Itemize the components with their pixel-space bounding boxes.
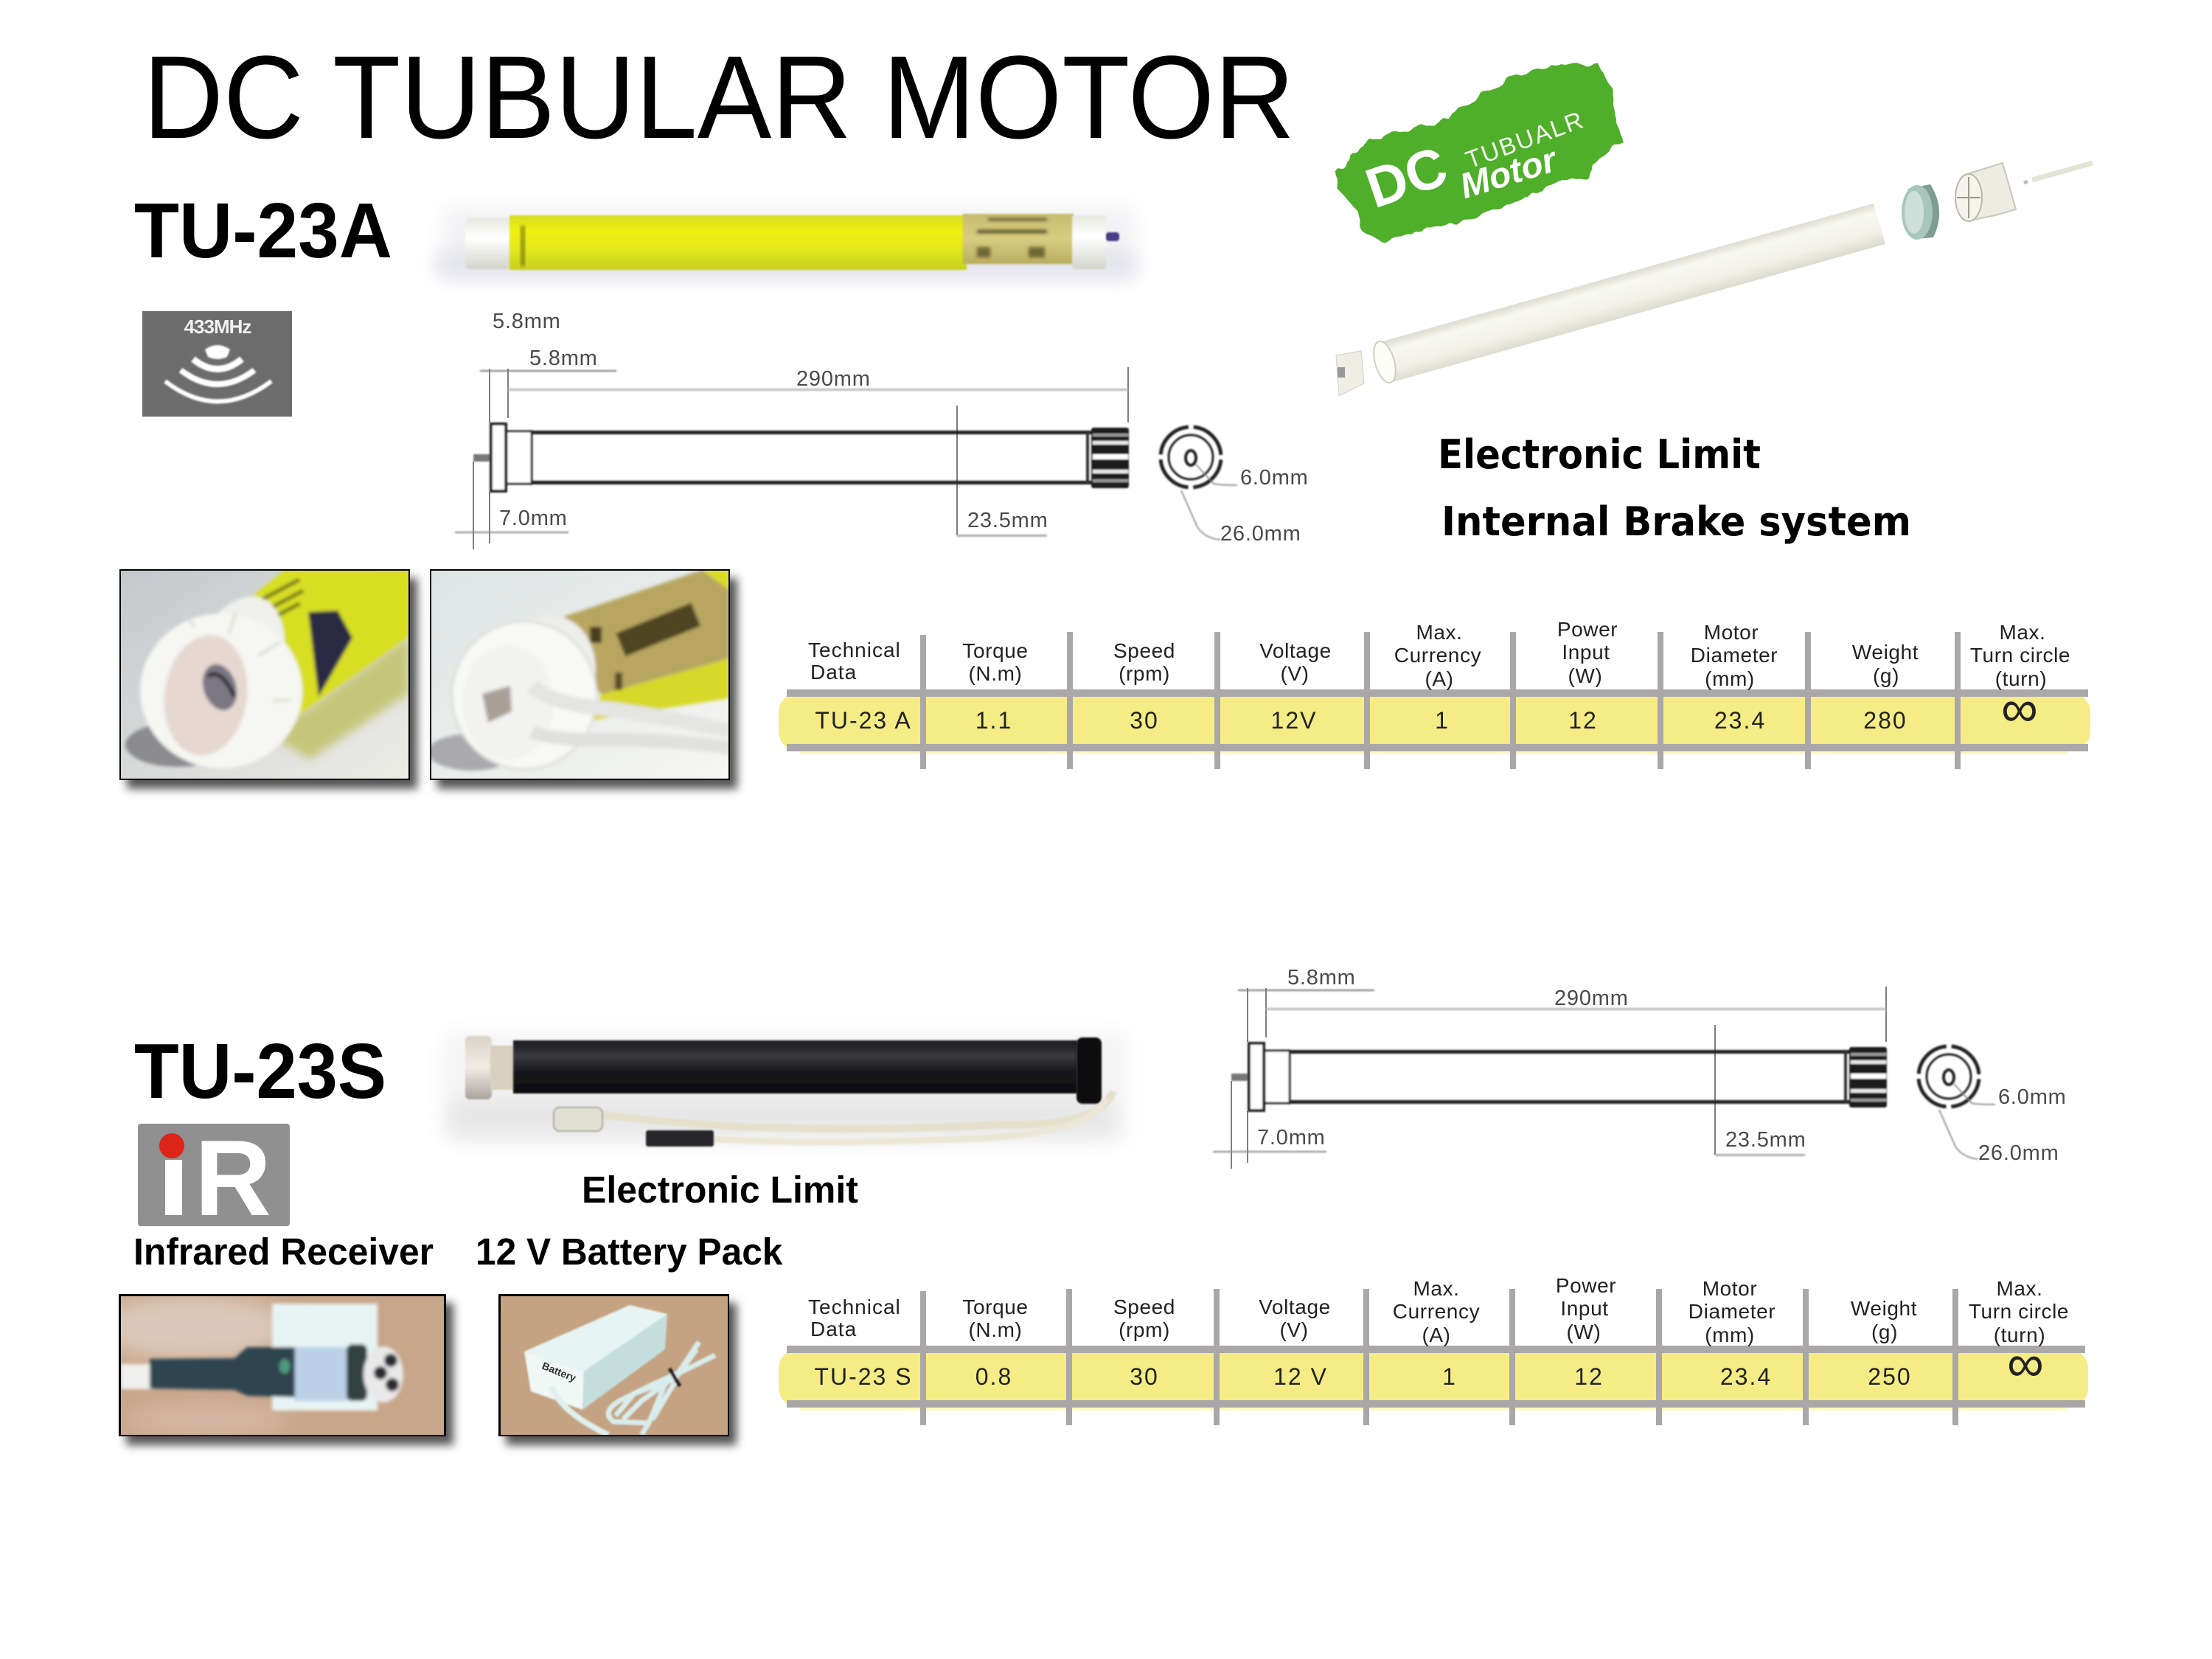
photo: 12 V battery pack: Battery xyxy=(540,1360,578,1384)
table header: Torque xyxy=(962,1295,1029,1318)
dimension drawing: TU-23A xyxy=(455,347,1309,549)
table header: Input xyxy=(1560,1297,1609,1320)
table header: (N.m) xyxy=(969,1318,1022,1341)
table header: (rpm) xyxy=(1119,1318,1170,1341)
table values: 12 V xyxy=(1273,1363,1328,1390)
table header: (A) xyxy=(1422,1324,1451,1346)
dimension drawing: TU-23S: 23.5mm xyxy=(1725,1128,1806,1152)
table header: Motor xyxy=(1703,1277,1757,1300)
label: extra 5.8mm: 5.8mm xyxy=(493,310,561,333)
table header: Technical xyxy=(808,639,901,661)
table header: Diameter xyxy=(1688,1300,1775,1323)
photo: black tubular motor xyxy=(442,1032,1128,1147)
dimension drawing: TU-23S: 290mm xyxy=(1554,987,1629,1010)
table header: Diameter xyxy=(1691,644,1778,667)
table values: 12 xyxy=(1574,1363,1604,1390)
table values xyxy=(815,680,2038,737)
end view circle xyxy=(1161,427,1237,540)
table header: (V) xyxy=(1279,1318,1309,1341)
table values: 12V xyxy=(1271,707,1317,734)
dimension drawing: TU-23S: 5.8mm xyxy=(1287,966,1356,990)
table header: (V) xyxy=(1280,662,1310,685)
table header: (W) xyxy=(1568,664,1602,687)
dimension drawing: TU-23S xyxy=(1213,966,2067,1169)
title: DC TUBULAR MOTOR xyxy=(143,31,1295,163)
table header: Input xyxy=(1562,641,1610,664)
table values xyxy=(814,1335,2044,1392)
table header: (mm) xyxy=(1705,667,1755,690)
table header: (turn) xyxy=(1994,1324,2045,1346)
table header: (g) xyxy=(1871,1321,1898,1343)
table header: Speed xyxy=(1113,639,1175,662)
table header: Weight xyxy=(1851,1297,1917,1320)
table header: Turn circle xyxy=(1969,1300,2069,1323)
badge: DC Tubular Motor: Motor xyxy=(1455,140,1562,206)
table values: 250 xyxy=(1868,1363,1912,1390)
table: TU-23A technical data xyxy=(779,618,2090,769)
table header xyxy=(808,1274,2069,1346)
table values: TU-23 A xyxy=(815,707,912,734)
dimension drawing: TU-23A: 23.5mm xyxy=(967,509,1048,532)
badge: DC Tubular Motor xyxy=(1336,63,1623,243)
table header xyxy=(808,618,2070,690)
dimension drawing: TU-23S: 26.0mm xyxy=(1978,1141,2059,1165)
table header: Max. xyxy=(1416,621,1463,644)
table values: 23.4 xyxy=(1720,1363,1772,1390)
table header: Data xyxy=(810,661,857,684)
table values: 23.4 xyxy=(1714,707,1766,734)
table header: (A) xyxy=(1425,667,1454,690)
photo: motor cable end xyxy=(428,569,737,789)
badge: DC Tubular Motor: DC xyxy=(1358,135,1455,220)
table header: Technical xyxy=(808,1295,901,1318)
table header: Currency xyxy=(1393,1300,1480,1323)
table values: 1 xyxy=(1435,707,1450,734)
table: TU-23S technical data xyxy=(779,1274,2088,1425)
table header: Voltage xyxy=(1259,1295,1331,1318)
exploded view: motor tube and parts xyxy=(1336,163,2093,396)
table header: (g) xyxy=(1873,664,1899,687)
table header: Weight xyxy=(1852,641,1919,664)
table header: Turn circle xyxy=(1970,644,2070,667)
text: 12 V Battery Pack: 12 V Battery Pack xyxy=(476,1230,783,1273)
photo: 12 V battery pack xyxy=(498,1294,737,1445)
icon: iR infrared xyxy=(138,1118,290,1238)
table header: Max. xyxy=(1413,1277,1460,1300)
table header: Currency xyxy=(1394,644,1481,667)
end view circle xyxy=(1919,1046,1995,1159)
table header: Torque xyxy=(962,639,1029,662)
heading: TU-23S: TU-23S xyxy=(134,1027,386,1115)
dimension drawing: TU-23S: 6.0mm xyxy=(1998,1085,2067,1109)
table header: (turn) xyxy=(1995,667,2047,690)
dimension drawing: TU-23A: 6.0mm xyxy=(1240,466,1309,490)
table values: ∞ xyxy=(2001,680,2038,737)
table header: Power xyxy=(1556,1274,1616,1297)
table values: 12 xyxy=(1568,707,1598,734)
dimension drawing: TU-23A: 5.8mm xyxy=(529,347,598,370)
table values: 280 xyxy=(1863,707,1907,734)
icon: iR infrared: R xyxy=(195,1118,271,1238)
table values: 30 xyxy=(1130,707,1159,734)
table header: Data xyxy=(810,1318,857,1340)
heading: TU-23A: TU-23A xyxy=(134,187,392,274)
table header: (W) xyxy=(1567,1321,1601,1343)
table values: 0.8 xyxy=(975,1363,1012,1390)
table values: ∞ xyxy=(2007,1335,2044,1392)
text: Infrared Receiver: Infrared Receiver xyxy=(133,1230,434,1273)
table values: 1 xyxy=(1442,1363,1457,1390)
table header: (mm) xyxy=(1705,1324,1755,1346)
table header: Speed xyxy=(1113,1295,1175,1318)
text: Electronic Limit: Electronic Limit xyxy=(1438,431,1761,478)
text: Electronic Limit: Electronic Limit xyxy=(582,1169,858,1211)
dimension drawing: TU-23A: 7.0mm xyxy=(499,507,568,530)
table header: Max. xyxy=(1996,1277,2043,1300)
icon: 433MHz wireless xyxy=(142,311,292,417)
badge: DC Tubular Motor: TUBUALR xyxy=(1462,105,1587,173)
icon: 433MHz wireless: 433MHz xyxy=(184,316,251,338)
photo: motor shaft end xyxy=(119,569,417,789)
photo: infrared receiver xyxy=(96,1294,453,1445)
table header: Power xyxy=(1557,618,1618,641)
table header: Motor xyxy=(1704,621,1759,644)
table header: Max. xyxy=(1999,621,2046,644)
table header: Voltage xyxy=(1259,639,1332,662)
photo: yellow tubular motor xyxy=(435,206,1135,280)
table header: (N.m) xyxy=(969,662,1022,685)
dimension drawing: TU-23A: 26.0mm xyxy=(1220,522,1301,546)
text: Internal Brake system: Internal Brake system xyxy=(1441,498,1911,545)
table header: (rpm) xyxy=(1119,662,1170,685)
dimension drawing: TU-23S: 7.0mm xyxy=(1257,1126,1326,1150)
table values: TU-23 S xyxy=(814,1363,913,1390)
table values: 1.1 xyxy=(975,707,1012,734)
table values: 30 xyxy=(1130,1363,1159,1390)
dimension drawing: TU-23A: 290mm xyxy=(796,367,871,391)
